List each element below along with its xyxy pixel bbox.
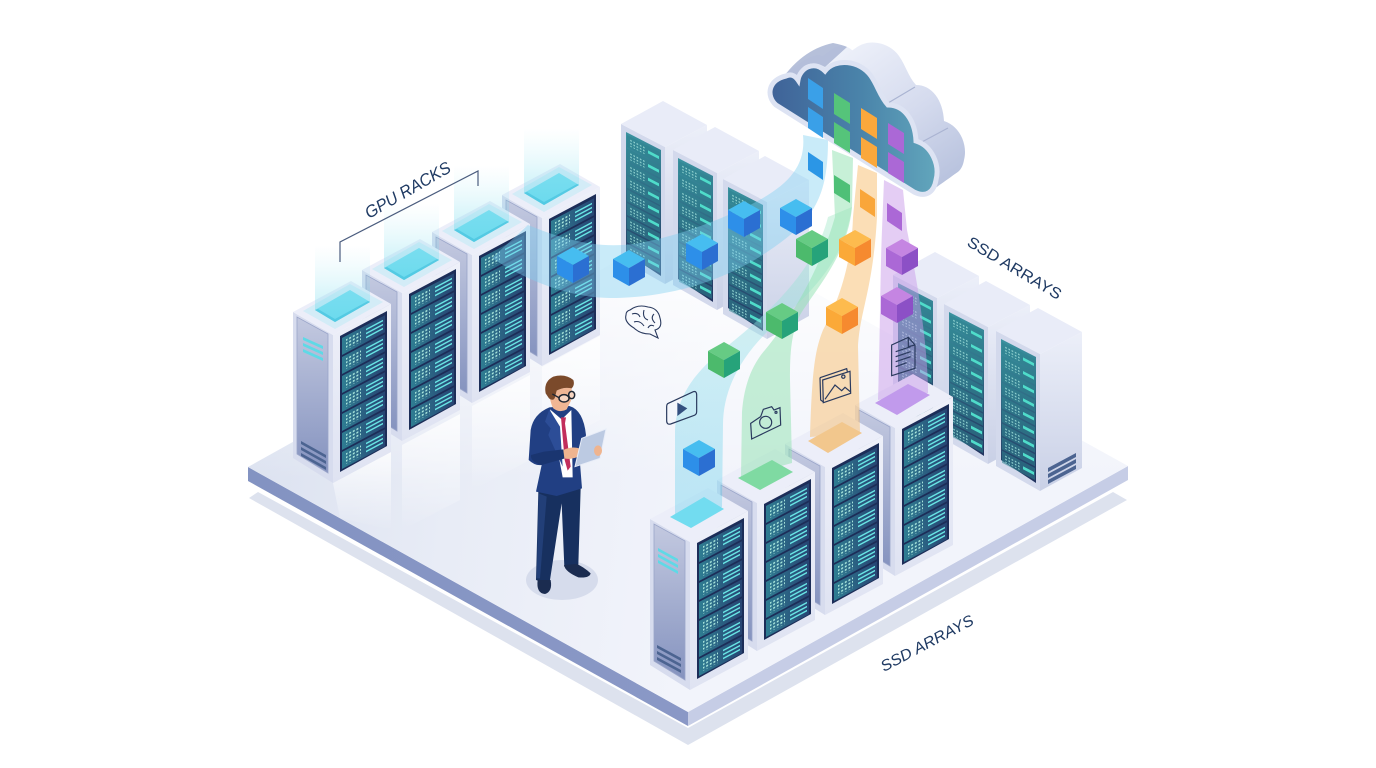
floor platform [248,222,1128,745]
rack group: front SSD arrays [650,374,953,690]
data cubes [557,199,918,476]
label bracket: GPU racks [340,171,478,262]
data stream: blue to GPU racks [492,135,828,298]
data stream: purple [878,180,928,400]
label: GPU RACKS: GPU RACKS [362,158,455,222]
icon: camera [751,407,781,439]
icon: brain [626,306,661,338]
rack group: center back SSD racks [621,101,809,339]
icon: picture [820,369,851,403]
rack group: right SSD arrays [893,252,1082,491]
data stream: green [741,150,853,477]
receiving wells on front racks [670,384,930,528]
icon: document [892,337,915,376]
icon: video [667,391,697,424]
label: SSD ARRAYS right: SSD ARRAYS [964,234,1064,304]
data stream: orange [810,165,877,437]
person with tablet [529,376,606,594]
person floor shadow [526,560,598,600]
label: SSD ARRAYS bottom: SSD ARRAYS [878,612,977,676]
falling data tiles [808,152,902,231]
data stream: blue to front rack [675,207,852,517]
cloud [770,42,965,194]
rack group: GPU racks [293,128,600,530]
